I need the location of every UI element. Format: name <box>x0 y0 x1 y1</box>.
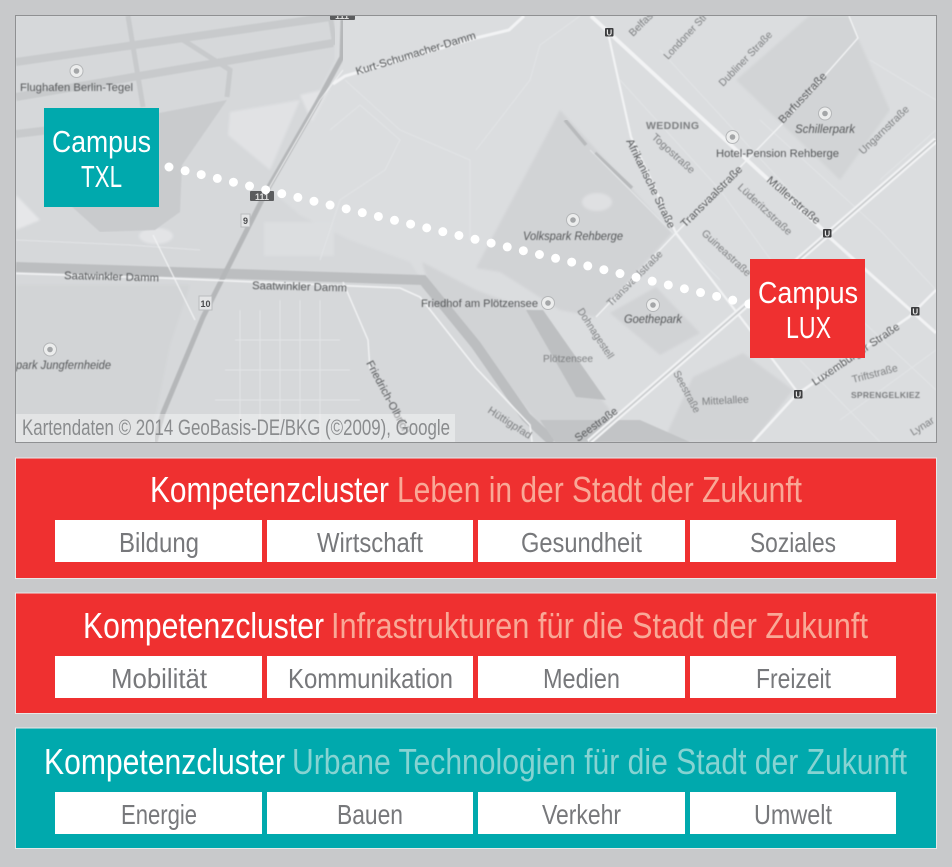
topic boxes: Freizeit <box>756 663 831 694</box>
map: place and street labels: Lynar <box>908 414 937 439</box>
map: place and street labels: Afrikanische Straße <box>623 137 677 230</box>
map: place and street labels: park Jungfernheide <box>15 360 111 372</box>
map: place and street labels: Dubliner Straße <box>717 29 775 89</box>
topic boxes: Mobilität <box>111 663 207 694</box>
callout: Campus LUX <box>750 259 865 358</box>
map: place and street labels <box>15 8 937 444</box>
map: place and street labels: Müllerstraße <box>764 174 822 227</box>
map: U-Bahn markers: U <box>912 308 918 316</box>
map: point of interest icons <box>44 64 832 356</box>
topic boxes: Verkehr <box>542 799 621 830</box>
panel: Infrastrukturen für die Stadt der Zukunft <box>16 593 936 714</box>
map: water <box>16 120 690 442</box>
callout: Campus TXL: TXL <box>81 159 122 194</box>
map: place and street labels: Guineastraße <box>699 227 753 279</box>
topic boxes: Umwelt <box>754 799 832 830</box>
map: road shields: 111 <box>255 192 269 202</box>
map: minor streets <box>239 150 656 401</box>
map: U-Bahn markers: U <box>795 390 801 400</box>
map: road shields: 111 <box>335 11 349 21</box>
heading: Leben in der Stadt der Zukunft <box>397 469 802 510</box>
panel: Leben in der Stadt der Zukunft <box>16 458 936 578</box>
callout: Campus LUX: Campus <box>758 275 858 310</box>
panel: map <box>15 8 937 444</box>
heading: Infrastrukturen für die Stadt der Zukunft <box>331 605 868 646</box>
map: road shields <box>199 10 355 310</box>
heading: Kompetenzcluster <box>44 741 285 782</box>
map: U-Bahn markers <box>605 28 920 400</box>
map: place and street labels: Plötzensee <box>543 353 593 365</box>
map: land areas <box>16 16 890 442</box>
map: place and street labels: Hüttigpfad <box>485 404 534 442</box>
map: motorway <box>155 20 343 442</box>
map: place and street labels: Friedrich-Olbrich <box>363 359 412 436</box>
callout: Campus LUX: LUX <box>786 310 831 345</box>
map: place and street labels: Saatwinkler Damm <box>252 280 347 294</box>
map: place and street labels: Hotel-Pension Rehberge <box>716 148 839 160</box>
topic boxes: Medien <box>543 663 620 694</box>
map: airport runways <box>16 15 335 232</box>
heading <box>44 741 907 782</box>
map: place and street labels: Seestraße <box>573 405 620 444</box>
panel: Urbane Technologien für die Stadt der Zukunft <box>16 728 936 848</box>
map: U-Bahn markers: U <box>824 230 830 238</box>
map: U-Bahn markers: U <box>606 28 612 38</box>
callout: Campus TXL <box>44 108 159 207</box>
heading: Kompetenzcluster <box>83 605 324 646</box>
heading: Kompetenzcluster <box>150 469 389 510</box>
topic boxes: Kommunikation <box>288 663 453 694</box>
map: place and street labels: Kurt-Schumacher-Damm <box>354 30 477 78</box>
map: road shields: 9 <box>243 216 248 226</box>
map: place and street labels: Friedhof am Plötzensee <box>421 298 538 310</box>
map: white roads <box>16 16 936 442</box>
topic boxes: Energie <box>121 799 197 830</box>
map: place and street labels: Togostraße <box>649 131 697 176</box>
topic boxes: Wirtschaft <box>317 527 423 558</box>
map: place and street labels: Schillerpark <box>795 124 856 136</box>
heading <box>83 605 868 646</box>
map: place and street labels: Belfast <box>627 8 658 39</box>
map: place and street labels: Luxemburger Straße <box>810 321 902 388</box>
dotted connection between campuses <box>169 167 749 304</box>
map: place and street labels: Londoner Str <box>661 11 710 62</box>
map: attribution: Kartendaten © 2014 GeoBasis-DE/BKG (©2009), Google <box>22 415 450 440</box>
map: place and street labels: Volkspark Rehberge <box>523 231 623 243</box>
callout: Campus TXL: Campus <box>52 124 151 159</box>
map: place and street labels: Dohnagestell <box>574 306 616 361</box>
map: place and street labels: WEDDING <box>646 120 699 132</box>
topic boxes <box>55 792 896 834</box>
map: place and street labels: Triftstraße <box>851 362 899 386</box>
map: place and street labels: Transvaalstraße <box>605 248 666 309</box>
map: place and street labels: Ungarnstraße <box>857 103 912 157</box>
topic boxes <box>55 520 896 562</box>
map: place and street labels: Goethepark <box>624 314 683 326</box>
map: place and street labels: Transvaalstraße <box>679 164 745 230</box>
map: place and street labels: SPRENGELKIEZ <box>851 390 920 400</box>
map: place and street labels: Saatwinkler Damm <box>64 270 159 284</box>
map: place and street labels: Lüderitzstraße <box>735 181 794 238</box>
map: place and street labels: Mittelallee <box>702 394 749 408</box>
topic boxes: Bauen <box>337 799 403 830</box>
topic boxes: Soziales <box>750 527 836 558</box>
topic boxes: Gesundheit <box>521 527 642 558</box>
map: place and street labels: Seestraße <box>670 369 703 415</box>
map: road shields: 10 <box>200 299 211 309</box>
map: place and street labels: Flughafen Berlin-Tegel <box>20 82 133 94</box>
heading <box>150 469 802 510</box>
topic boxes: Bildung <box>119 527 199 558</box>
topic boxes <box>55 656 896 698</box>
map: place and street labels: Barfusstraße <box>776 70 830 126</box>
